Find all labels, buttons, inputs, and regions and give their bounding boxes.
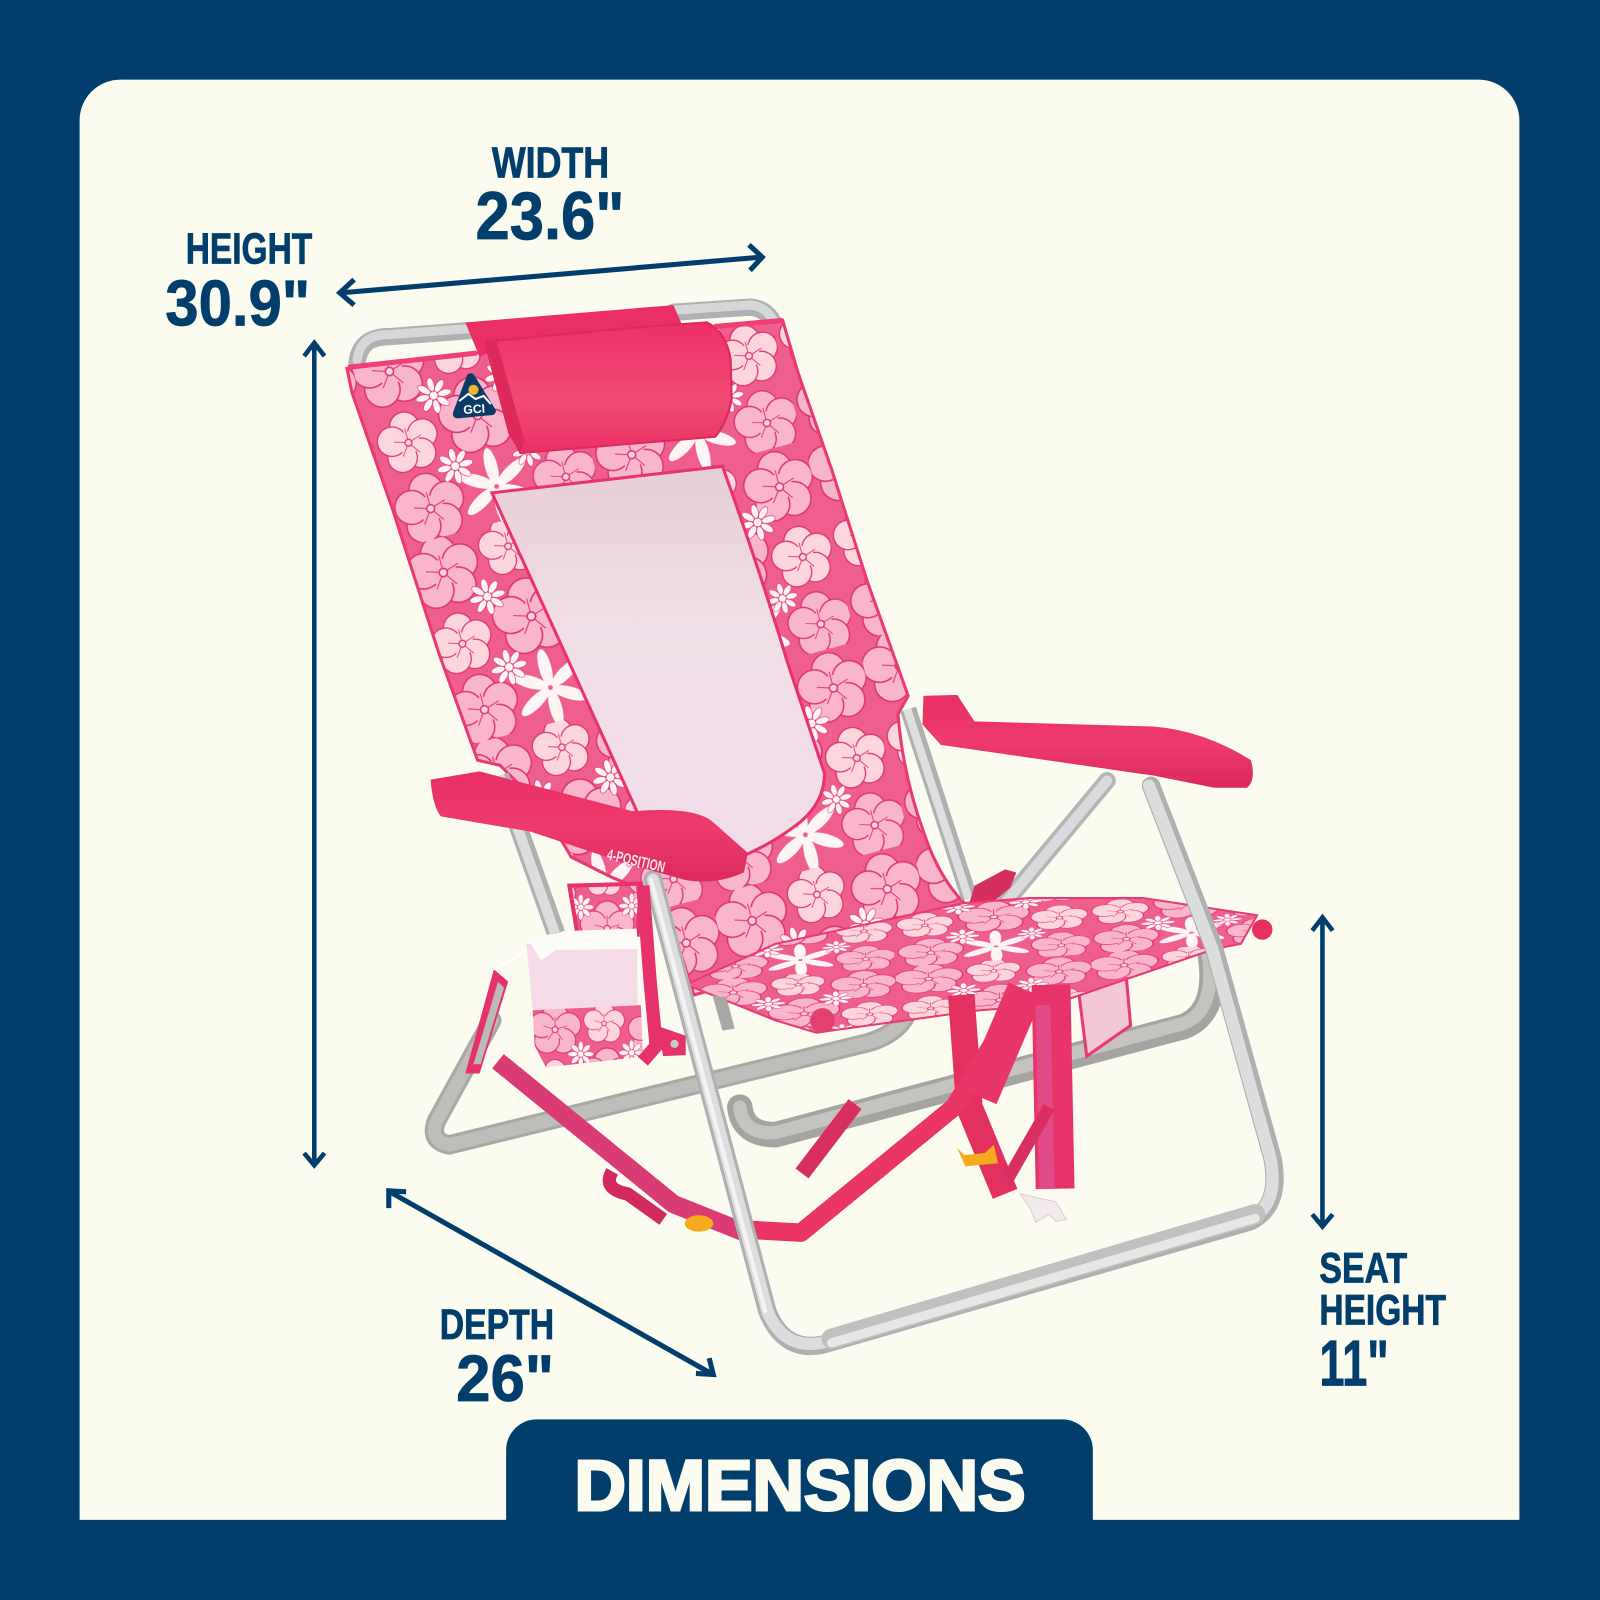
dimension: seat height [1312,917,1446,1400]
pouch side binding [643,886,656,1061]
left side bracket [465,969,508,1073]
product image: pink floral backpack beach chair [347,305,1275,1346]
seat front roll [810,1008,835,1033]
left rear strut [499,776,556,934]
front frame loop [651,786,1275,1346]
pouch lower floral fabric [533,1005,643,1067]
arrow [304,343,324,1165]
value: 30.9" [165,267,310,340]
seat pivot bracket [712,995,735,1031]
top binding strip [348,320,783,367]
pouch upper fabric [569,884,641,935]
seat hinge [969,869,1016,903]
yellow buckles [685,1145,998,1232]
dimension: depth [389,1191,713,1416]
mesh panel [492,466,824,855]
armrest label: 4-POSITION [605,847,667,876]
dimension: width [340,139,762,305]
drawstring cord [494,951,527,969]
value: 23.6" [476,179,624,254]
seat fabric [686,898,1257,1033]
arrow [389,1191,713,1374]
title: DIMENSIONS [574,1446,1026,1526]
right back strut [907,709,969,898]
top bar of frame [357,305,776,362]
icon: GCI logo badge [453,373,496,418]
straps under seat [498,985,1055,1233]
label: DEPTH [440,1301,554,1349]
headrest pillow [487,322,732,453]
label: SEAT [1319,1245,1407,1293]
pivot bolt [670,1040,679,1048]
left armrest [431,771,748,882]
arrow [1312,917,1333,1227]
seat bar end cap [1252,919,1272,940]
pouch mesh [527,934,638,1012]
rear frame tubes [434,781,1212,1145]
headrest flap [465,305,684,357]
cup pouch [494,884,656,1067]
label: HEIGHT [186,224,312,273]
value: 26" [456,1342,554,1416]
bracket plate [473,982,504,1064]
pivot bracket [656,1026,686,1056]
label line two: HEIGHT [1319,1286,1446,1334]
icon: GCI logo badge: GCI [463,402,486,417]
label: WIDTH [492,139,609,188]
dimension: height [165,224,324,1165]
white plastic clip [1020,1194,1066,1222]
rear pocket [1077,957,1131,1056]
right armrest [922,695,1253,788]
value: 11" [1319,1327,1389,1400]
title tab [506,1419,1093,1520]
pillow side shade [487,339,524,453]
arrow [340,245,762,305]
pouch drawstring top [527,929,638,960]
backrest fabric [347,320,969,995]
